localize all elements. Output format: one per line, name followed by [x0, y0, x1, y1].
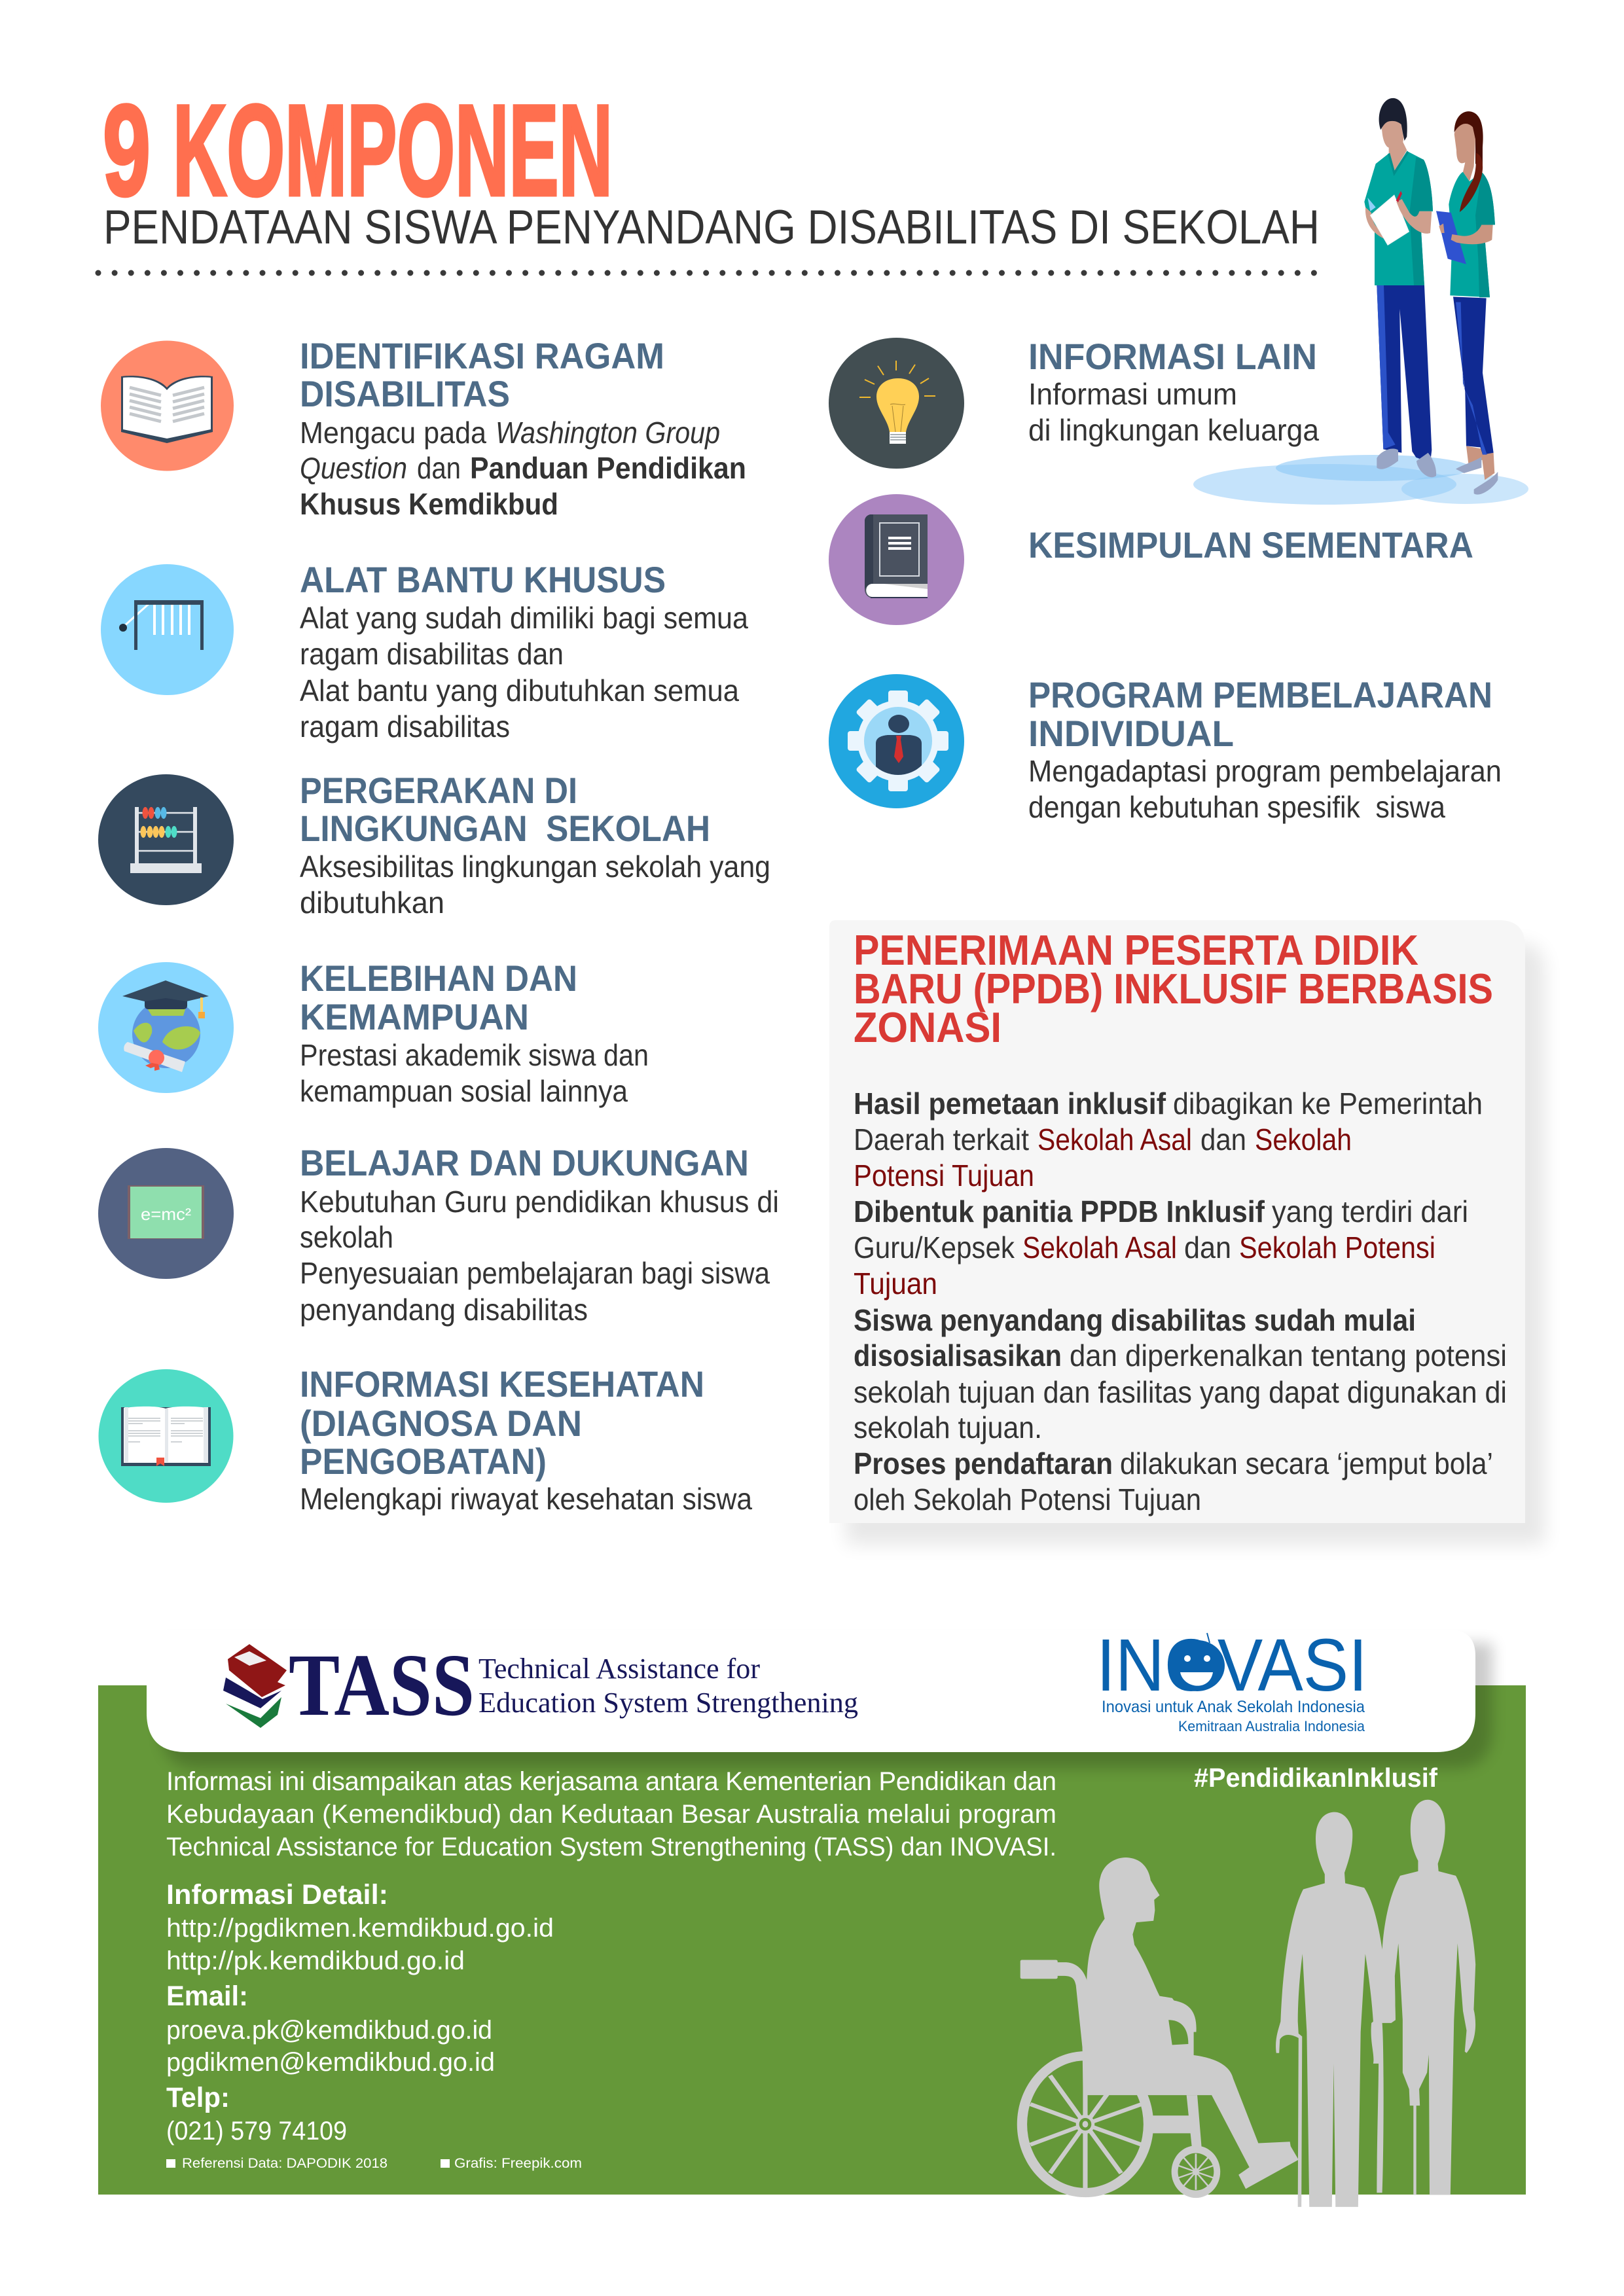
section: identifikasi ragam disabilitas [300, 335, 746, 521]
text block: cooperation statement: Kebudayaan (Kemendikbud) dan Kedutaan Besar Australia melalui program [166, 1800, 1056, 1829]
title: KOMPONEN [173, 78, 613, 223]
icon: assistive device on sky circle [101, 564, 234, 695]
icon: blackboard: e=mc² [141, 1204, 191, 1224]
icon: open book on teal circle [98, 1369, 233, 1503]
section: program pembelajaran individual [1028, 674, 1502, 824]
panel: PPDB inklusif [829, 920, 1545, 1545]
section: informasi lain: INFORMASI LAIN [1028, 336, 1317, 377]
logo: INOVASI: INOVASI [1096, 1624, 1367, 1706]
text block: PPDB details: sekolah tujuan dan fasilitas yang dapat digunakan di [854, 1375, 1507, 1409]
logo: TASS: Education System Strengthening [478, 1687, 858, 1719]
text block: cooperation statement [166, 1767, 1056, 1861]
section: identifikasi ragam disabilitas: Mengacu pada [300, 416, 486, 450]
icon: gear with person [829, 674, 964, 808]
text block: contact details: Informasi Detail: [166, 1879, 388, 1910]
text block: contact details: Email: [166, 1981, 248, 2012]
text block: PPDB details: yang terdiri dari [1272, 1194, 1468, 1229]
text block: contact details: http://pgdikmen.kemdikbud.go.id [166, 1914, 554, 1943]
section: program pembelajaran individual: PROGRAM PEMBELAJARAN [1028, 674, 1492, 715]
section: informasi kesehatan [300, 1363, 752, 1516]
text block: PPDB details: disosialisasikan [854, 1338, 1062, 1372]
section: alat bantu khusus: Alat yang sudah dimiliki bagi semua [300, 601, 748, 635]
text block: contact details: Telp: [166, 2082, 230, 2113]
section: program pembelajaran individual: INDIVIDUAL [1028, 713, 1234, 754]
section: alat bantu khusus [300, 559, 748, 744]
title: 9 [103, 78, 151, 223]
icon: blackboard [98, 1148, 234, 1279]
section: kelebihan dan kemampuan [300, 958, 649, 1108]
illustration: standing person with prosthetic leg silhouette [1382, 1800, 1475, 2195]
illustration: two health workers [1193, 98, 1528, 505]
section: informasi kesehatan: PENGOBATAN) [300, 1441, 547, 1482]
text block: PPDB details: Sekolah Potensi [1239, 1230, 1435, 1265]
footnote: graphics credit: Grafis: Freepik.com [454, 2156, 582, 2171]
section: kelebihan dan kemampuan: KELEBIHAN DAN [300, 958, 577, 999]
text block: PPDB details: dilakukan secara ‘jemput bola’ [1120, 1446, 1493, 1480]
icon: abacus on navy circle [98, 774, 234, 905]
section: kelebihan dan kemampuan: Prestasi akademik siswa dan [300, 1038, 649, 1072]
logo: INOVASI: Kemitraan Australia Indonesia [1178, 1718, 1365, 1734]
icon: closed book on purple circle [829, 494, 964, 625]
section: informasi lain [1028, 336, 1319, 447]
heading: kesimpulan sementara: KESIMPULAN SEMENTARA [1028, 524, 1473, 565]
text block: PPDB details: Sekolah Asal [1022, 1230, 1177, 1265]
section: alat bantu khusus: ragam disabilitas [300, 709, 510, 744]
text block: PPDB details: Sekolah [1255, 1122, 1352, 1157]
text block: contact details: pgdikmen@kemdikbud.go.id [166, 2048, 495, 2077]
section: identifikasi ragam disabilitas: DISABILITAS [300, 373, 510, 414]
section: kelebihan dan kemampuan: KEMAMPUAN [300, 996, 529, 1037]
section: informasi kesehatan: Melengkapi riwayat kesehatan siswa [300, 1482, 752, 1516]
text block: PPDB details: Hasil pemetaan inklusif [854, 1086, 1166, 1121]
text block: PPDB details: Potensi Tujuan [854, 1158, 1034, 1193]
text block: PPDB details: Guru/Kepsek [854, 1230, 1015, 1265]
text block: contact details [166, 1879, 554, 2145]
icon: globe with graduation cap [98, 962, 234, 1093]
heading: PPDB [854, 926, 1493, 1051]
heading: PPDB: ZONASI [854, 1003, 1001, 1051]
text block: PPDB details: Dibentuk panitia PPDB Inklusif [854, 1194, 1265, 1229]
section: pergerakan di lingkungan sekolah: LINGKUNGAN SEKOLAH [300, 808, 710, 849]
text block: cooperation statement: Informasi ini disampaikan atas kerjasama antara Kementerian Pendidikan dan [166, 1767, 1056, 1796]
subtitle: PENDATAAN SISWA PENYANDANG DISABILITAS DI SEKOLAH [103, 201, 1320, 254]
logo: INOVASI: Inovasi untuk Anak Sekolah Indonesia [1102, 1698, 1365, 1716]
logo: TASS [223, 1636, 858, 1734]
icon: light bulb [829, 338, 964, 469]
text block: PPDB details: Daerah terkait [854, 1122, 1029, 1157]
section: belajar dan dukungan [300, 1142, 779, 1327]
logo: TASS: TASS [289, 1636, 475, 1734]
text block: PPDB details: Proses pendaftaran [854, 1446, 1113, 1480]
section: identifikasi ragam disabilitas: Washington Group [496, 416, 720, 450]
section: informasi lain: Informasi umum [1028, 377, 1237, 411]
text block: PPDB details: dan diperkenalkan tentang potensi [1070, 1338, 1507, 1372]
heading: PPDB: PENERIMAAN PESERTA DIDIK [854, 926, 1418, 974]
section: kelebihan dan kemampuan: kemampuan sosial lainnya [300, 1074, 628, 1108]
text block: PPDB details: dibagikan ke Pemerintah [1173, 1086, 1483, 1121]
section: belajar dan dukungan: sekolah [300, 1220, 393, 1254]
title [103, 78, 613, 223]
text block: contact details: http://pk.kemdikbud.go.id [166, 1946, 465, 1975]
section: program pembelajaran individual: dengan kebutuhan spesifik siswa [1028, 790, 1445, 824]
panel: logo bar [147, 1624, 1492, 1768]
hashtag: #PendidikanInklusif [1194, 1763, 1437, 1793]
text block: PPDB details [854, 1086, 1507, 1516]
section: pergerakan di lingkungan sekolah: Aksesibilitas lingkungan sekolah yang [300, 850, 770, 884]
section: belajar dan dukungan: BELAJAR DAN DUKUNGAN [300, 1142, 749, 1183]
text block: contact details: proeva.pk@kemdikbud.go.id [166, 2016, 492, 2045]
section: alat bantu khusus: Alat bantu yang dibutuhkan semua [300, 673, 739, 708]
heading: PPDB: BARU (PPDB) INKLUSIF BERBASIS [854, 965, 1493, 1013]
section: identifikasi ragam disabilitas: dan [417, 451, 461, 485]
illustration: standing person with cane silhouette [1276, 1812, 1396, 2207]
section: belajar dan dukungan: penyandang disabilitas [300, 1293, 588, 1327]
logo: TASS: Technical Assistance for [478, 1653, 760, 1685]
text block: PPDB details: dan [1184, 1230, 1231, 1265]
section: informasi kesehatan: (DIAGNOSA DAN [300, 1403, 582, 1444]
section: alat bantu khusus: ALAT BANTU KHUSUS [300, 559, 666, 600]
text block: PPDB details: dan [1200, 1122, 1246, 1157]
section: alat bantu khusus: ragam disabilitas dan [300, 637, 564, 671]
section: belajar dan dukungan: Penyesuaian pembelajaran bagi siswa [300, 1256, 770, 1290]
section: informasi lain: di lingkungan keluarga [1028, 413, 1319, 447]
section: identifikasi ragam disabilitas: Khusus Kemdikbud [300, 487, 558, 521]
section: pergerakan di lingkungan sekolah: PERGERAKAN DI [300, 770, 577, 811]
section: identifikasi ragam disabilitas: Question [300, 451, 407, 485]
text block: PPDB details: Tujuan [854, 1266, 937, 1300]
text block: cooperation statement: Technical Assistance for Education System Strengthening (TASS) dan INOVASI. [166, 1833, 1056, 1861]
section: pergerakan di lingkungan sekolah [300, 770, 770, 920]
section: pergerakan di lingkungan sekolah: dibutuhkan [300, 886, 444, 920]
panel: green footer [98, 1685, 1526, 2195]
section: identifikasi ragam disabilitas: Panduan Pendidikan [470, 451, 746, 485]
text block: PPDB details: sekolah tujuan. [854, 1410, 1042, 1444]
section: belajar dan dukungan: Kebutuhan Guru pendidikan khusus di [300, 1185, 779, 1219]
section: informasi kesehatan: INFORMASI KESEHATAN [300, 1363, 704, 1405]
icon: open book on coral circle [101, 340, 234, 471]
section: identifikasi ragam disabilitas: IDENTIFIKASI RAGAM [300, 335, 664, 376]
text block: PPDB details: Siswa penyandang disabilitas sudah mulai [854, 1303, 1416, 1337]
text block: PPDB details: Sekolah Asal [1038, 1122, 1192, 1157]
text block: contact details: (021) 579 74109 [166, 2117, 347, 2145]
section: program pembelajaran individual: Mengadaptasi program pembelajaran [1028, 754, 1502, 788]
text block: PPDB details: oleh Sekolah Potensi Tujuan [854, 1482, 1201, 1516]
illustration: wheelchair user silhouette [1017, 1857, 1299, 2198]
footnote: data reference: Referensi Data: DAPODIK 2018 [182, 2156, 388, 2171]
